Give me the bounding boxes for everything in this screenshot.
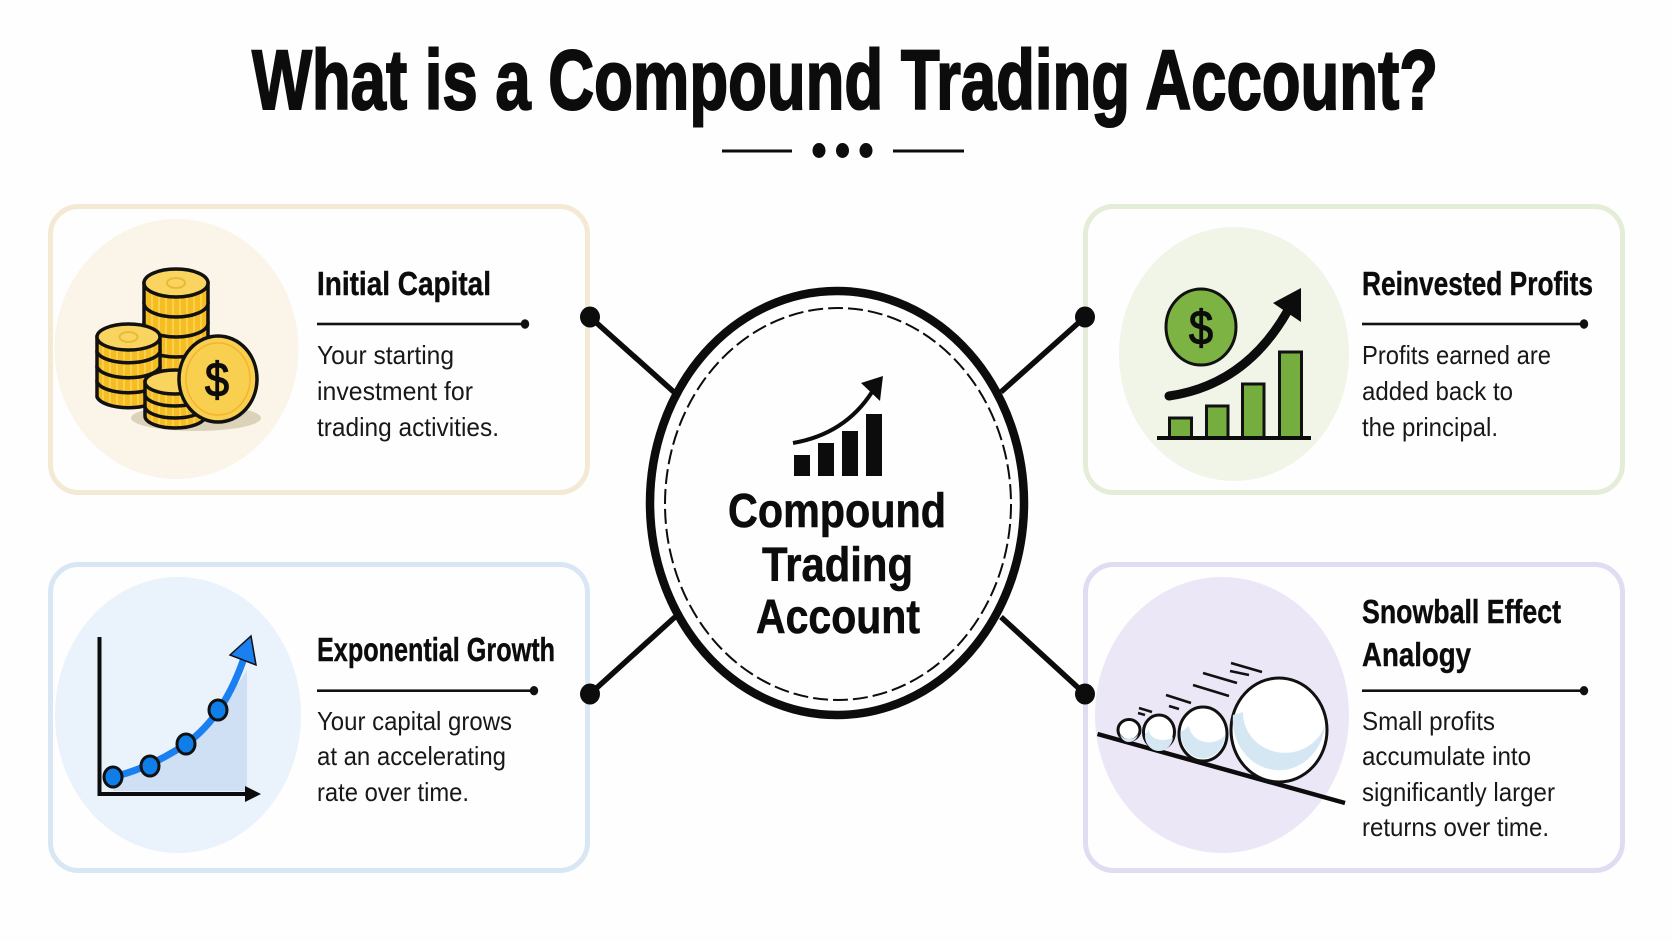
icon: coin stacks: $	[205, 354, 229, 407]
icon: profit coin, arrow and bars	[1157, 288, 1311, 438]
text: initial capital description: Your starting	[317, 340, 454, 370]
text: reinvested profits description	[1362, 340, 1551, 442]
heading: snowball effect analogy: Snowball Effect	[1362, 593, 1561, 630]
text: snowball effect description	[1362, 706, 1555, 842]
text: initial capital description	[317, 340, 499, 442]
text: reinvested profits description: Profits earned are	[1362, 340, 1551, 370]
panel: reinvested profits	[1086, 206, 1622, 492]
center label: Account	[756, 591, 920, 644]
icon: rising bars and arrow	[793, 376, 883, 476]
rule	[317, 319, 529, 329]
icon: profit coin, arrow and bars: $	[1189, 302, 1213, 355]
rule	[317, 686, 538, 695]
panel: initial capital	[50, 206, 588, 492]
heading: exponential growth: Exponential Growth	[317, 631, 555, 668]
text: exponential growth description: rate over time.	[317, 777, 469, 807]
heading: snowball effect analogy	[1362, 593, 1561, 673]
text: reinvested profits description: the principal.	[1362, 412, 1498, 442]
icon: exponential growth chart	[100, 636, 261, 802]
center label: Compound	[728, 485, 946, 538]
heading: reinvested profits: Reinvested Profits	[1362, 265, 1593, 302]
connectors between center and panels	[580, 306, 1095, 704]
icon: coin stacks	[97, 269, 261, 431]
heading: initial capital: Initial Capital	[317, 265, 491, 302]
panel: exponential growth	[50, 564, 588, 870]
text: exponential growth description: Your capital grows	[317, 706, 512, 736]
text: initial capital description: investment for	[317, 376, 473, 406]
text: snowball effect description: significantly larger	[1362, 777, 1555, 807]
rule	[1362, 686, 1588, 695]
center label	[728, 485, 946, 644]
heading: snowball effect analogy: Analogy	[1362, 636, 1472, 673]
text: snowball effect description: accumulate into	[1362, 741, 1531, 771]
center label: Trading	[762, 539, 913, 592]
text: reinvested profits description: added back to	[1362, 376, 1513, 406]
rule	[1362, 319, 1588, 329]
text: snowball effect description: returns over time.	[1362, 812, 1549, 842]
title divider	[722, 143, 964, 158]
text: exponential growth description	[317, 706, 512, 807]
panel: snowball effect analogy	[1086, 564, 1622, 870]
center badge: compound trading account	[650, 291, 1024, 715]
text: initial capital description: trading activities.	[317, 412, 499, 442]
icon: snowballs rolling downhill	[1098, 663, 1345, 803]
text: snowball effect description: Small profits	[1362, 706, 1495, 736]
text: exponential growth description: at an accelerating	[317, 741, 506, 771]
